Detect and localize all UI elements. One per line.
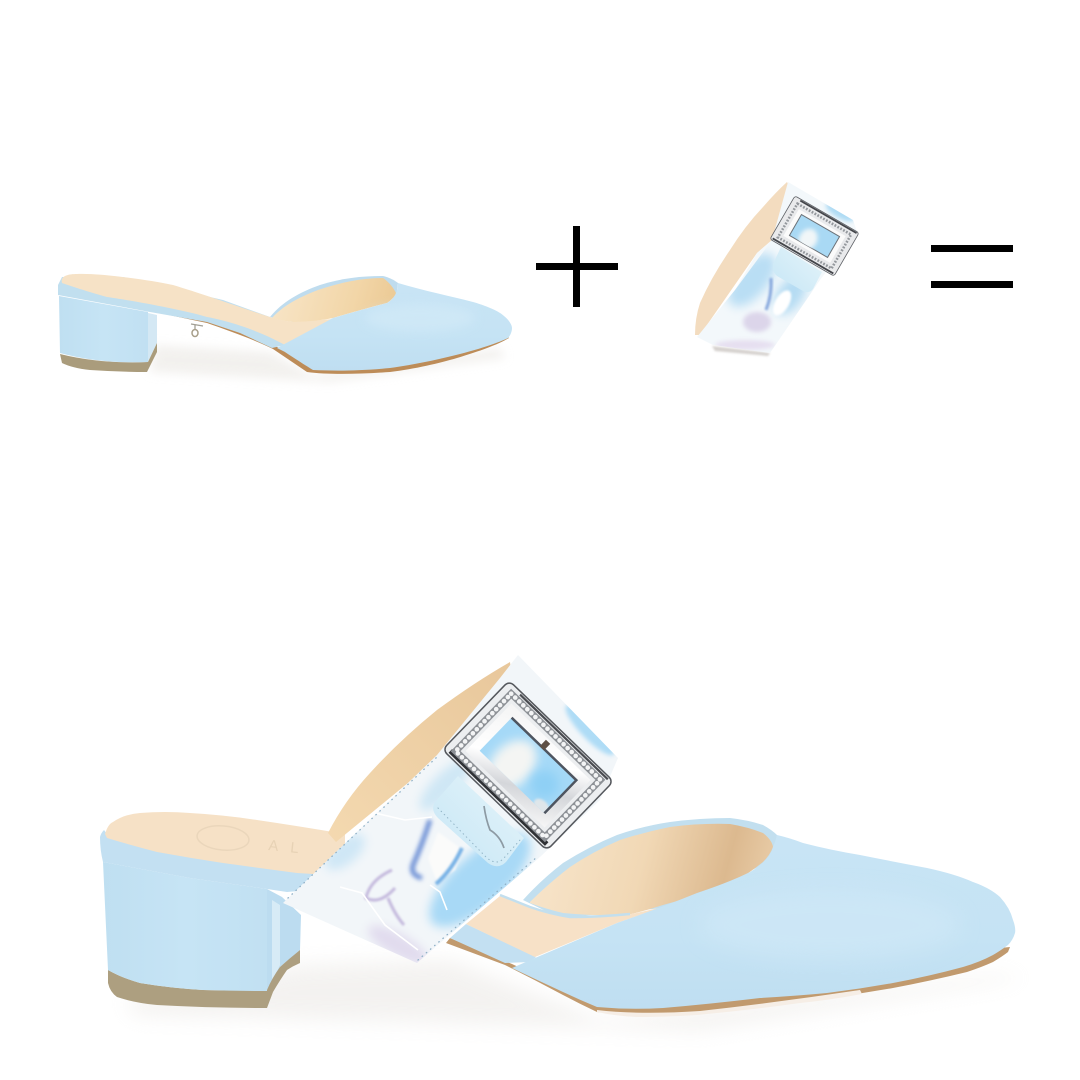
- opening interior: [272, 278, 396, 322]
- bottom lilac: [368, 924, 428, 963]
- small buckle dark edges: [773, 198, 857, 273]
- small rhinestones: [778, 204, 851, 268]
- large buckle strap: [283, 655, 620, 972]
- logo on insole: [196, 824, 311, 858]
- small inner frame: [783, 209, 846, 263]
- pale wash top: [417, 760, 470, 813]
- window wash: [486, 734, 559, 812]
- tab stitching: [438, 808, 520, 862]
- strap tab: [433, 776, 524, 866]
- large strap watercolor: [319, 699, 620, 972]
- insole: [62, 274, 333, 345]
- large opening interior: [530, 824, 773, 915]
- large sole white edge: [597, 990, 862, 1017]
- blue wash lower right: [424, 828, 536, 932]
- shoe ground shadow: [150, 345, 505, 382]
- logo text: AL: [268, 837, 311, 858]
- heel inner side: [148, 313, 157, 362]
- large rim band heel: [100, 830, 345, 892]
- small buckle: [770, 196, 859, 276]
- rhinestone ring base: [456, 694, 600, 837]
- small strap lining: [695, 182, 792, 335]
- large heel side: [267, 889, 301, 990]
- small buckle frame: [770, 196, 859, 276]
- plus sign: [536, 226, 618, 307]
- top blue: [824, 204, 854, 224]
- buckle dark edge upper: [520, 695, 608, 779]
- large strap body: [283, 655, 618, 963]
- charm ring: [192, 330, 198, 336]
- bottom lilac: [715, 340, 775, 350]
- lilac wash: [743, 312, 771, 332]
- blue under patch: [436, 848, 462, 884]
- inner silver frame: [466, 704, 590, 827]
- small window: [789, 215, 840, 257]
- tiny charm: [191, 324, 203, 330]
- heel base tan: [60, 343, 157, 372]
- white patch: [772, 289, 792, 316]
- lower blue wash: [770, 278, 811, 319]
- small window wash: [796, 226, 820, 250]
- small mule shoe: [58, 274, 512, 382]
- large insole heel: [105, 812, 345, 876]
- window white patch: [486, 734, 542, 790]
- large vamp: [512, 835, 1015, 1009]
- large insole front: [466, 896, 663, 957]
- logo swirl: [196, 824, 250, 852]
- large shoe ground shadow: [125, 960, 1025, 1030]
- large heel block: [103, 862, 267, 991]
- small strap watercolor: [715, 199, 857, 350]
- large vamp highlight: [700, 890, 960, 960]
- large heel base tan: [108, 950, 300, 1008]
- heel block: [59, 296, 148, 362]
- vamp highlight: [365, 304, 475, 332]
- prong: [540, 740, 550, 750]
- small strap shadow: [712, 346, 770, 356]
- small strap body: [697, 182, 857, 353]
- rim band: [58, 277, 300, 348]
- large heel inner highlight: [272, 900, 280, 982]
- strap stitching: [288, 757, 537, 960]
- lilac swirl: [366, 870, 404, 925]
- pale wash left: [323, 832, 368, 872]
- white cracks: [340, 813, 447, 950]
- buckle dark edge lower: [450, 751, 547, 844]
- top right blue: [564, 704, 615, 758]
- vamp: [277, 283, 512, 371]
- small buckle strap: [695, 182, 859, 356]
- rhinestones: [456, 694, 600, 837]
- large opening rim: [523, 818, 777, 918]
- large buckle: [443, 681, 613, 850]
- indigo streak: [412, 820, 430, 878]
- white patch: [430, 835, 460, 880]
- large strap lining: [328, 662, 512, 842]
- lower bar: [931, 281, 1013, 288]
- small window white patch: [796, 226, 820, 250]
- tab crack: [484, 806, 504, 848]
- deep blue streak: [766, 278, 771, 310]
- buckle window: [480, 718, 576, 813]
- window deep blue: [527, 769, 559, 798]
- thin blue line: [500, 895, 630, 917]
- large side wall: [450, 924, 536, 963]
- opening rim: [270, 276, 398, 322]
- upper bar: [931, 245, 1013, 252]
- window lower right sparkle: [533, 798, 550, 812]
- small tab: [773, 247, 822, 292]
- equals sign: [931, 245, 1013, 288]
- blue wash: [725, 249, 778, 311]
- buckle silver body: [443, 681, 613, 850]
- large sole line: [446, 938, 1010, 1015]
- large combined shoe: [100, 812, 1025, 1030]
- window dark outline: [480, 718, 576, 813]
- sole line: [150, 309, 509, 374]
